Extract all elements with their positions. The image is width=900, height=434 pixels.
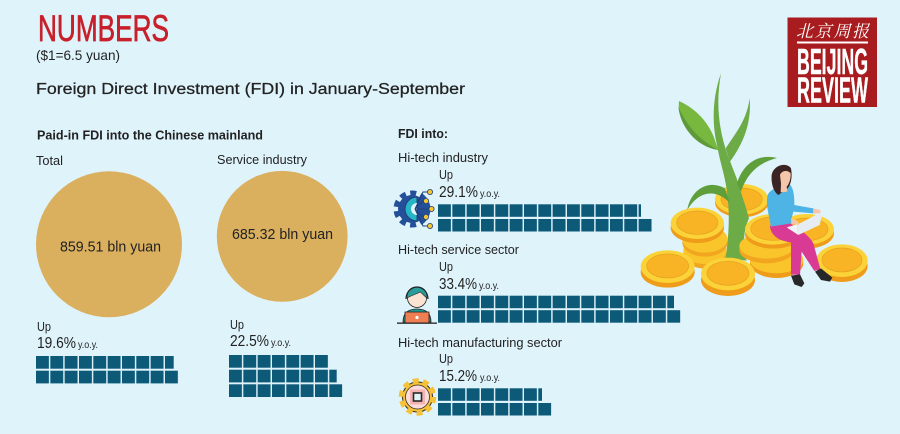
growth: hi-tech service sector: y.o.y. xyxy=(479,281,499,292)
waffle: hi-tech manufacturing sector xyxy=(438,388,551,416)
exchange rate note: ($1=6.5 yuan) xyxy=(36,47,120,63)
woman with laptop xyxy=(767,165,832,287)
front coins xyxy=(641,214,868,296)
growth: service industry: y.o.y. xyxy=(271,338,291,349)
circle: service industry FDI xyxy=(217,171,348,302)
illustration: plant and coins xyxy=(671,184,834,269)
label: hi-tech industry: Hi-tech industry xyxy=(398,150,488,165)
waffle: hi-tech industry xyxy=(438,204,652,232)
icon: gear with circuit xyxy=(396,189,434,229)
logo: Beijing Review xyxy=(788,17,877,110)
circle: service industry FDI: 685.32 bln yuan xyxy=(232,226,333,243)
coin stack: left xyxy=(671,208,728,269)
growth: hi-tech industry: 29.1% xyxy=(439,184,478,201)
label: hi-tech service sector: Hi-tech service sector xyxy=(398,242,520,257)
growth: total: y.o.y. xyxy=(78,340,98,351)
growth: total: 19.6% xyxy=(37,335,76,352)
subtitle: Foreign Direct Investment (FDI) in January-September xyxy=(36,81,465,98)
coin: bottom centre xyxy=(701,258,755,296)
growth: hi-tech service sector xyxy=(439,260,499,293)
growth: hi-tech service sector: Up xyxy=(439,260,453,274)
label: total: Total xyxy=(36,153,63,168)
panel heading: Paid-in FDI into the Chinese mainland xyxy=(37,128,263,142)
label: service industry: Service industry xyxy=(217,152,307,167)
plant stem and leaves xyxy=(678,73,777,261)
growth: hi-tech manufacturing sector xyxy=(439,352,500,385)
coin: right back xyxy=(779,214,834,249)
logo: Beijing Review: 北京周报 xyxy=(796,17,871,42)
label: hi-tech manufacturing sector: Hi-tech manufacturing sector xyxy=(398,335,563,350)
growth: hi-tech industry: Up xyxy=(439,168,453,182)
title: NUMBERS xyxy=(38,8,169,49)
panel heading: FDI into: xyxy=(398,126,448,141)
panel: FDI into sectors xyxy=(396,126,681,416)
coin stack: right xyxy=(739,214,803,278)
panel: paid-in FDI into the Chinese mainland xyxy=(36,128,348,397)
growth: hi-tech industry xyxy=(439,168,500,201)
icon: customer service agent xyxy=(397,287,437,324)
growth: service industry xyxy=(230,318,291,350)
waffle: total xyxy=(36,356,178,383)
growth: hi-tech manufacturing sector: Up xyxy=(439,352,453,366)
growth: hi-tech industry: y.o.y. xyxy=(480,189,500,200)
circle: total FDI: 859.51 bln yuan xyxy=(60,238,161,256)
coin: right xyxy=(816,244,868,282)
growth: total xyxy=(37,320,98,352)
growth: service industry: 22.5% xyxy=(230,333,269,350)
waffle: service industry xyxy=(229,355,342,397)
growth: hi-tech service sector: 33.4% xyxy=(439,276,477,293)
coin: behind plant xyxy=(715,184,768,217)
waffle: hi-tech service sector xyxy=(438,296,681,323)
growth: hi-tech manufacturing sector: 15.2% xyxy=(439,368,477,385)
growth: total: Up xyxy=(37,320,51,334)
icon: gear with chip xyxy=(401,380,434,414)
circle: total FDI xyxy=(36,171,182,317)
growth: service industry: Up xyxy=(230,318,244,332)
coin: bottom left xyxy=(641,250,695,288)
growth: hi-tech manufacturing sector: y.o.y. xyxy=(480,373,500,384)
